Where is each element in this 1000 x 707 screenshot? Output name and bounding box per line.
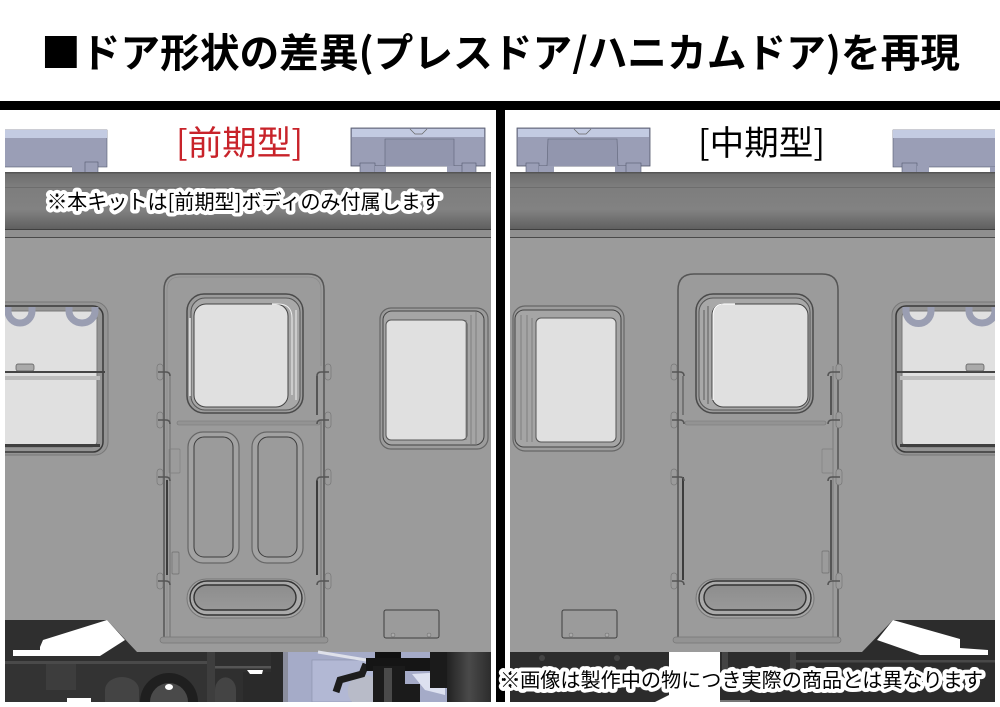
panel: middle type xyxy=(510,128,1000,702)
right passenger window xyxy=(380,308,488,449)
roof equipment left xyxy=(0,130,107,173)
note: image disclaimer: ※画像は製作中の物につき実際の商品とは異なります xyxy=(500,664,983,693)
number plate xyxy=(384,610,439,638)
underframe and bogie xyxy=(5,620,491,702)
roof equipment right xyxy=(351,128,485,173)
panel: early type xyxy=(0,128,491,702)
door lower vent xyxy=(187,579,305,618)
underframe and bogie xyxy=(510,620,995,702)
door panels xyxy=(188,432,303,563)
number plate xyxy=(562,610,617,638)
door outline with handrails xyxy=(157,274,331,643)
car body xyxy=(5,172,491,652)
door window xyxy=(187,294,303,413)
title: ■ドア形状の差異(プレスドア/ハニカムドア)を再現 xyxy=(41,21,960,79)
left passenger window xyxy=(0,302,108,455)
label: early type: [前期型] xyxy=(176,116,303,165)
car body xyxy=(510,172,995,652)
roof equipment right xyxy=(893,130,1000,173)
door outline with handrails xyxy=(671,274,842,643)
door lower vent xyxy=(696,579,814,618)
left passenger window xyxy=(513,306,624,451)
note: kit body: ※本キットは[前期型]ボディのみ付属します xyxy=(47,185,441,215)
roof equipment left xyxy=(517,128,650,173)
top divider xyxy=(0,101,1000,110)
right passenger window xyxy=(892,302,1000,455)
center divider xyxy=(496,101,505,702)
door window xyxy=(696,294,813,413)
label: middle type: [中期型] xyxy=(698,116,825,165)
